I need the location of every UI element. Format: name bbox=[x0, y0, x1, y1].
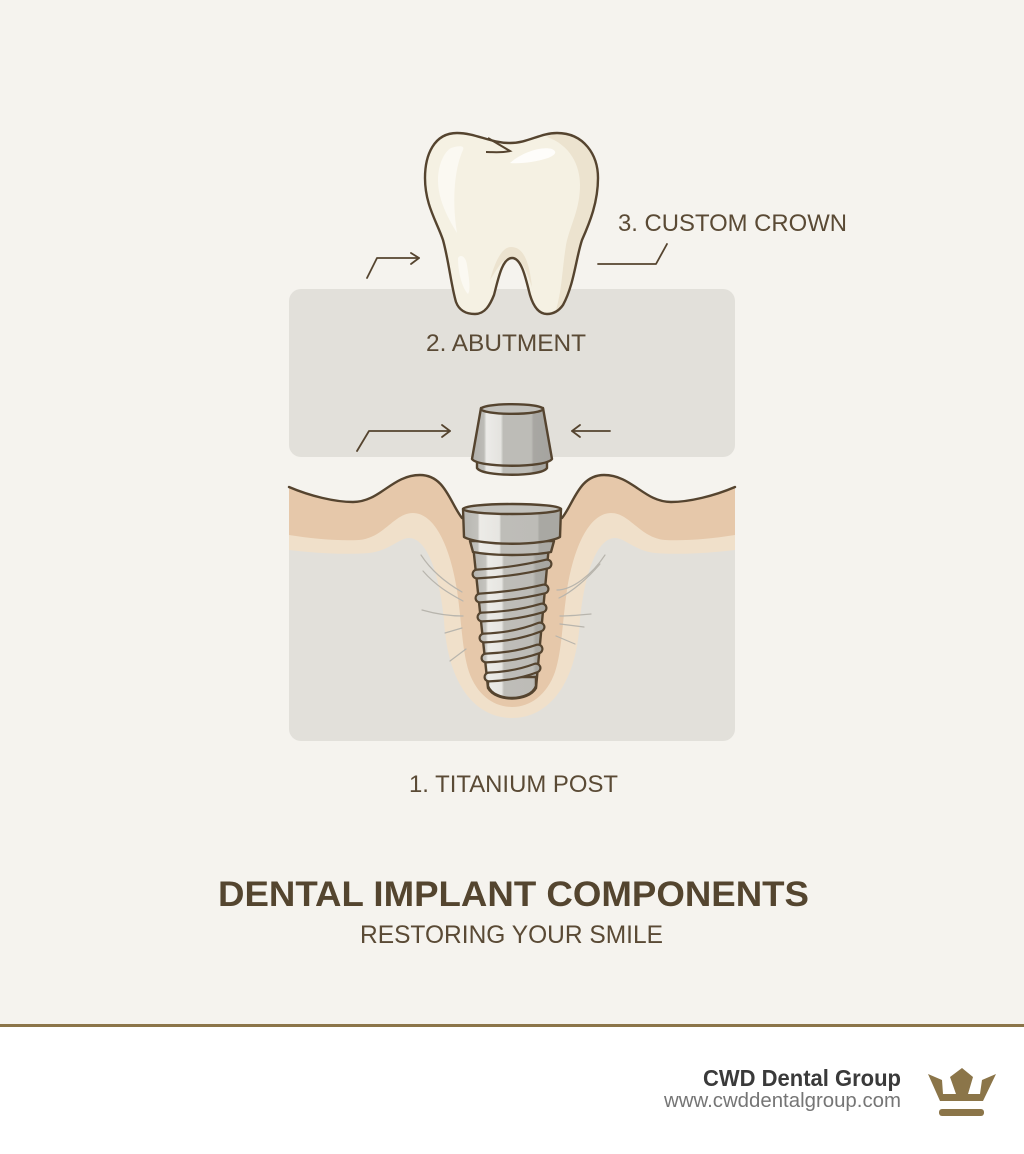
arrow: crown left bbox=[367, 253, 419, 278]
gum outline bbox=[289, 475, 735, 518]
tooth fissure bbox=[486, 138, 510, 152]
post collar bbox=[470, 541, 554, 555]
abutment body bbox=[472, 408, 552, 466]
tooth highlight left bbox=[438, 146, 463, 233]
label: titanium post: 1. TITANIUM POST bbox=[409, 771, 618, 798]
arrow: abutment right bbox=[572, 425, 610, 437]
post threads bbox=[477, 564, 547, 677]
footer website: www.cwddentalgroup.com bbox=[663, 1090, 901, 1112]
tooth outline bbox=[425, 133, 598, 314]
label: custom crown: 3. CUSTOM CROWN bbox=[618, 210, 847, 237]
tooth shading right bbox=[547, 133, 598, 310]
footer band bbox=[0, 1027, 1024, 1154]
gum tissue bbox=[289, 475, 735, 718]
tooth shading crotch bbox=[490, 247, 532, 287]
tooth highlight root bbox=[458, 256, 470, 294]
arrow: abutment left bbox=[357, 425, 450, 451]
abutment rim bbox=[477, 462, 547, 475]
tooth highlight top bbox=[510, 148, 555, 163]
footer brand name: CWD Dental Group bbox=[703, 1065, 901, 1091]
post tip bbox=[488, 677, 536, 698]
outer light gum layer bbox=[289, 475, 735, 718]
title: DENTAL IMPLANT COMPONENTS bbox=[218, 875, 809, 914]
abutment top bbox=[481, 404, 543, 414]
subtitle: RESTORING YOUR SMILE bbox=[360, 921, 663, 949]
icon: crown logo bbox=[928, 1068, 996, 1116]
panel: lower bone zone bbox=[289, 520, 735, 741]
arrow: crown leader right bbox=[598, 244, 667, 264]
post shaft bbox=[473, 545, 549, 698]
footer rule bbox=[0, 1024, 1024, 1027]
icon: titanium post bbox=[463, 504, 561, 698]
label: abutment: 2. ABUTMENT bbox=[426, 330, 586, 357]
bone integration lines bbox=[421, 555, 605, 661]
inner darker gum layer bbox=[289, 475, 735, 707]
post head top bbox=[463, 504, 561, 514]
panel: upper gray zone bbox=[289, 289, 735, 457]
icon: tooth crown bbox=[425, 133, 598, 314]
tooth body bbox=[425, 133, 598, 314]
icon: abutment bbox=[472, 404, 552, 475]
post head bbox=[463, 509, 561, 544]
